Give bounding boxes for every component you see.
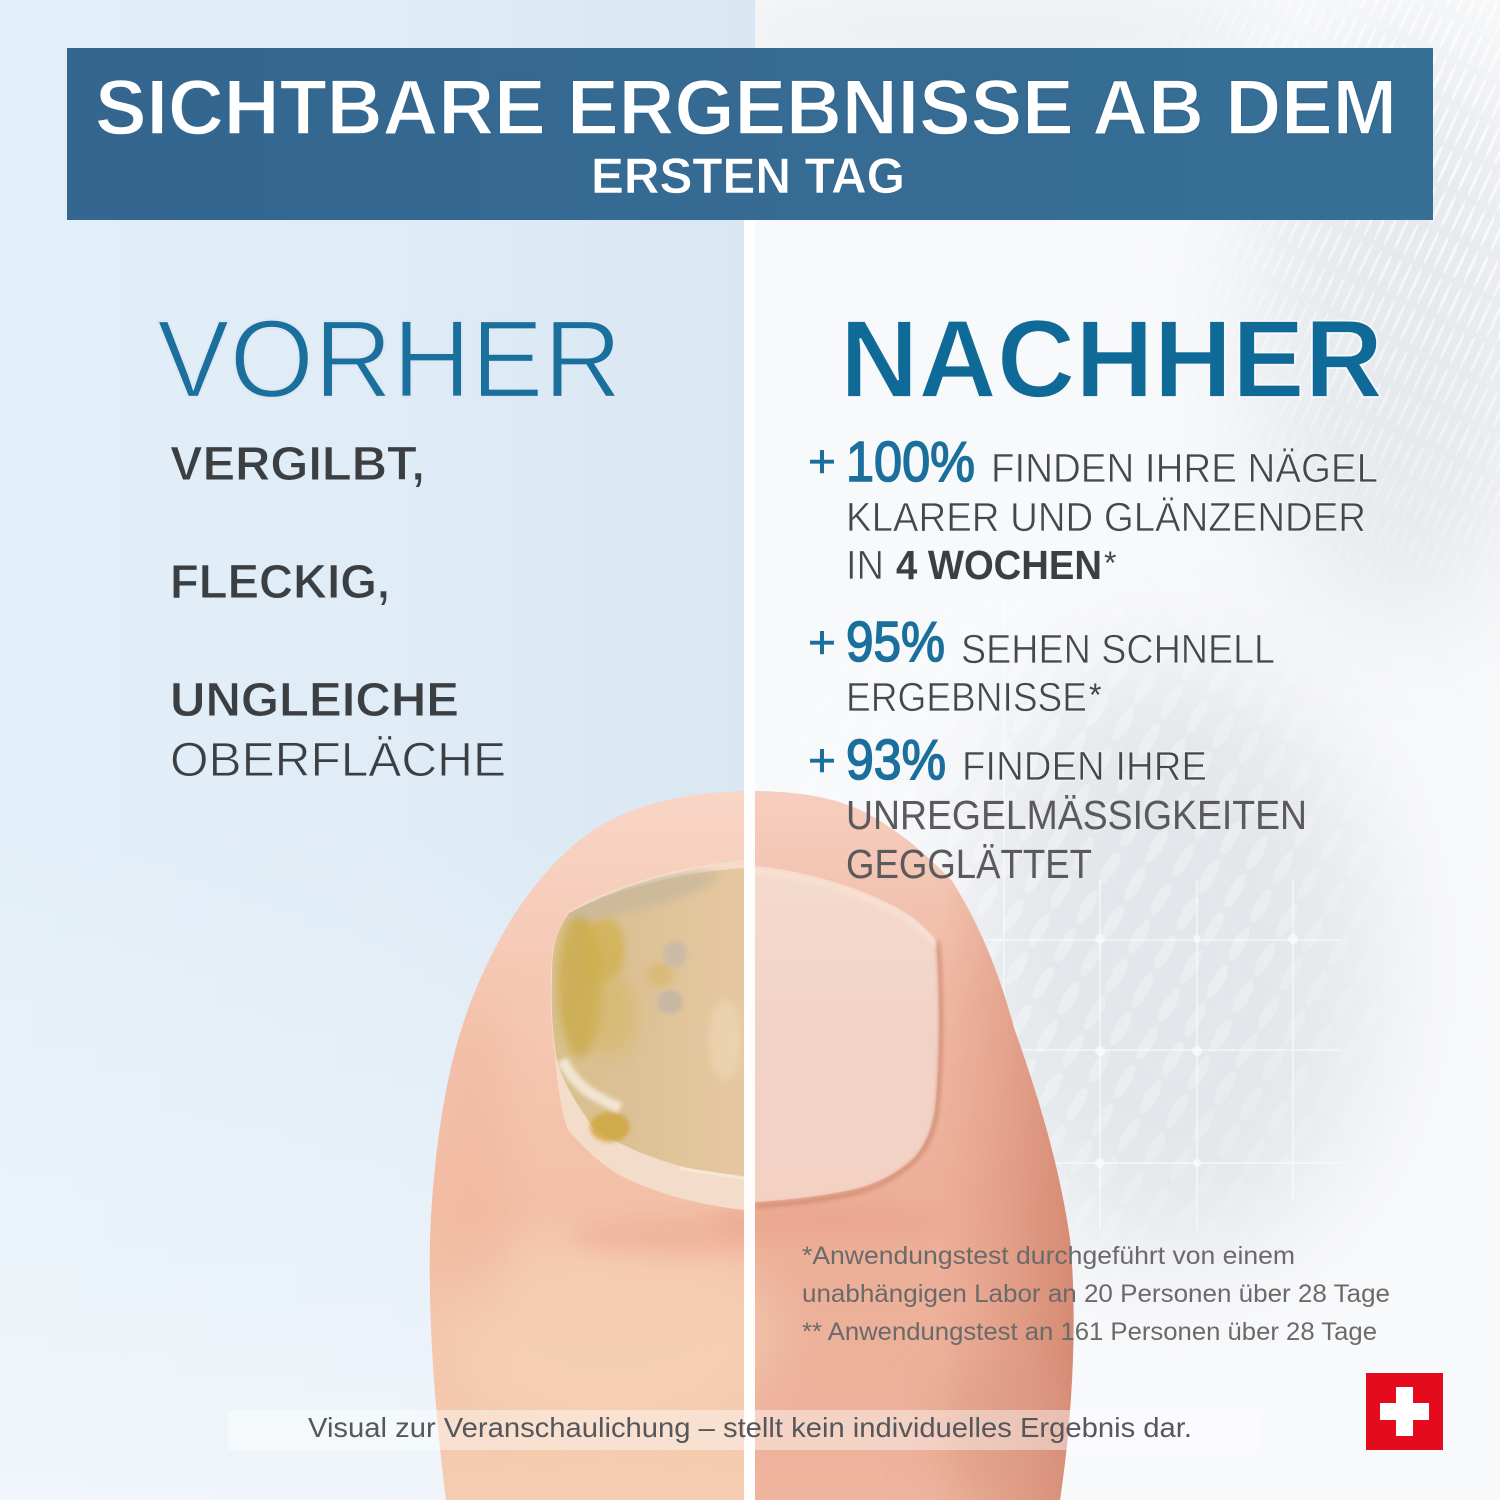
title banner <box>67 48 1433 220</box>
panel: after background <box>755 0 1500 1344</box>
disclaimer strip: Visual zur Veranschaulichung – stellt kein individuelles Ergebnis dar. <box>308 1412 1192 1443</box>
stat: 95 percent: * <box>1089 677 1101 713</box>
stat: 100 percent: KLARER UND GLÄNZENDER <box>846 494 1366 540</box>
stat: 100 percent: IN <box>846 542 884 588</box>
footnotes: ** Anwendungstest an 161 Personen über 28 Tage <box>802 1318 1377 1346</box>
before list <box>170 438 506 787</box>
before list: VERGILBT, <box>170 438 425 491</box>
stat: 100 percent: + <box>808 435 836 487</box>
stat: 95 percent: SEHEN SCHNELL <box>961 626 1275 672</box>
disclaimer strip <box>228 1410 1262 1450</box>
stat: 93 percent: 93% <box>846 728 946 792</box>
stat: 95 percent: + <box>808 616 836 668</box>
divider line <box>744 220 755 1500</box>
panel: before background <box>0 0 755 1500</box>
title line 2: ERSTEN TAG <box>591 148 905 204</box>
icon: swiss flag <box>1366 1373 1443 1450</box>
title line 1: SICHTBARE ERGEBNISSE AB DEM <box>95 63 1397 151</box>
before list: UNGLEICHE <box>170 674 459 727</box>
nail: healthy after <box>755 866 941 1206</box>
photo: toe before and after <box>420 780 1090 1500</box>
stat: 95 percent: ERGEBNISSE <box>846 674 1087 720</box>
stat: 93 percent: GEGGLÄTTET <box>846 841 1092 887</box>
stat: 100 percent: 100% <box>846 430 975 494</box>
nail: discoloured before <box>551 860 744 1210</box>
stat: 93 percent: FINDEN IHRE <box>962 743 1207 789</box>
stat: 93 percent: UNREGELMÄSSIGKEITEN <box>846 792 1307 838</box>
heading: after: NACHHER <box>840 298 1383 421</box>
footnotes: *Anwendungstest durchgeführt von einem <box>802 1242 1295 1270</box>
stat: 100 percent: FINDEN IHRE NÄGEL <box>991 445 1378 491</box>
before list: OBERFLÄCHE <box>170 734 506 787</box>
stat: 95 percent: 95% <box>846 610 945 674</box>
stat: 93 percent <box>808 728 1307 887</box>
stat: 93 percent: + <box>808 734 836 786</box>
footnotes <box>802 1242 1390 1346</box>
footnotes: unabhängigen Labor an 20 Personen über 28 Tage <box>802 1280 1390 1308</box>
stat: 95 percent <box>808 610 1275 720</box>
stat: 100 percent: * <box>1104 545 1116 581</box>
stat: 100 percent <box>808 430 1378 588</box>
stat: 100 percent: 4 WOCHEN <box>896 542 1102 588</box>
before list: FLECKIG, <box>170 556 390 609</box>
heading: before: VORHER <box>157 298 622 421</box>
